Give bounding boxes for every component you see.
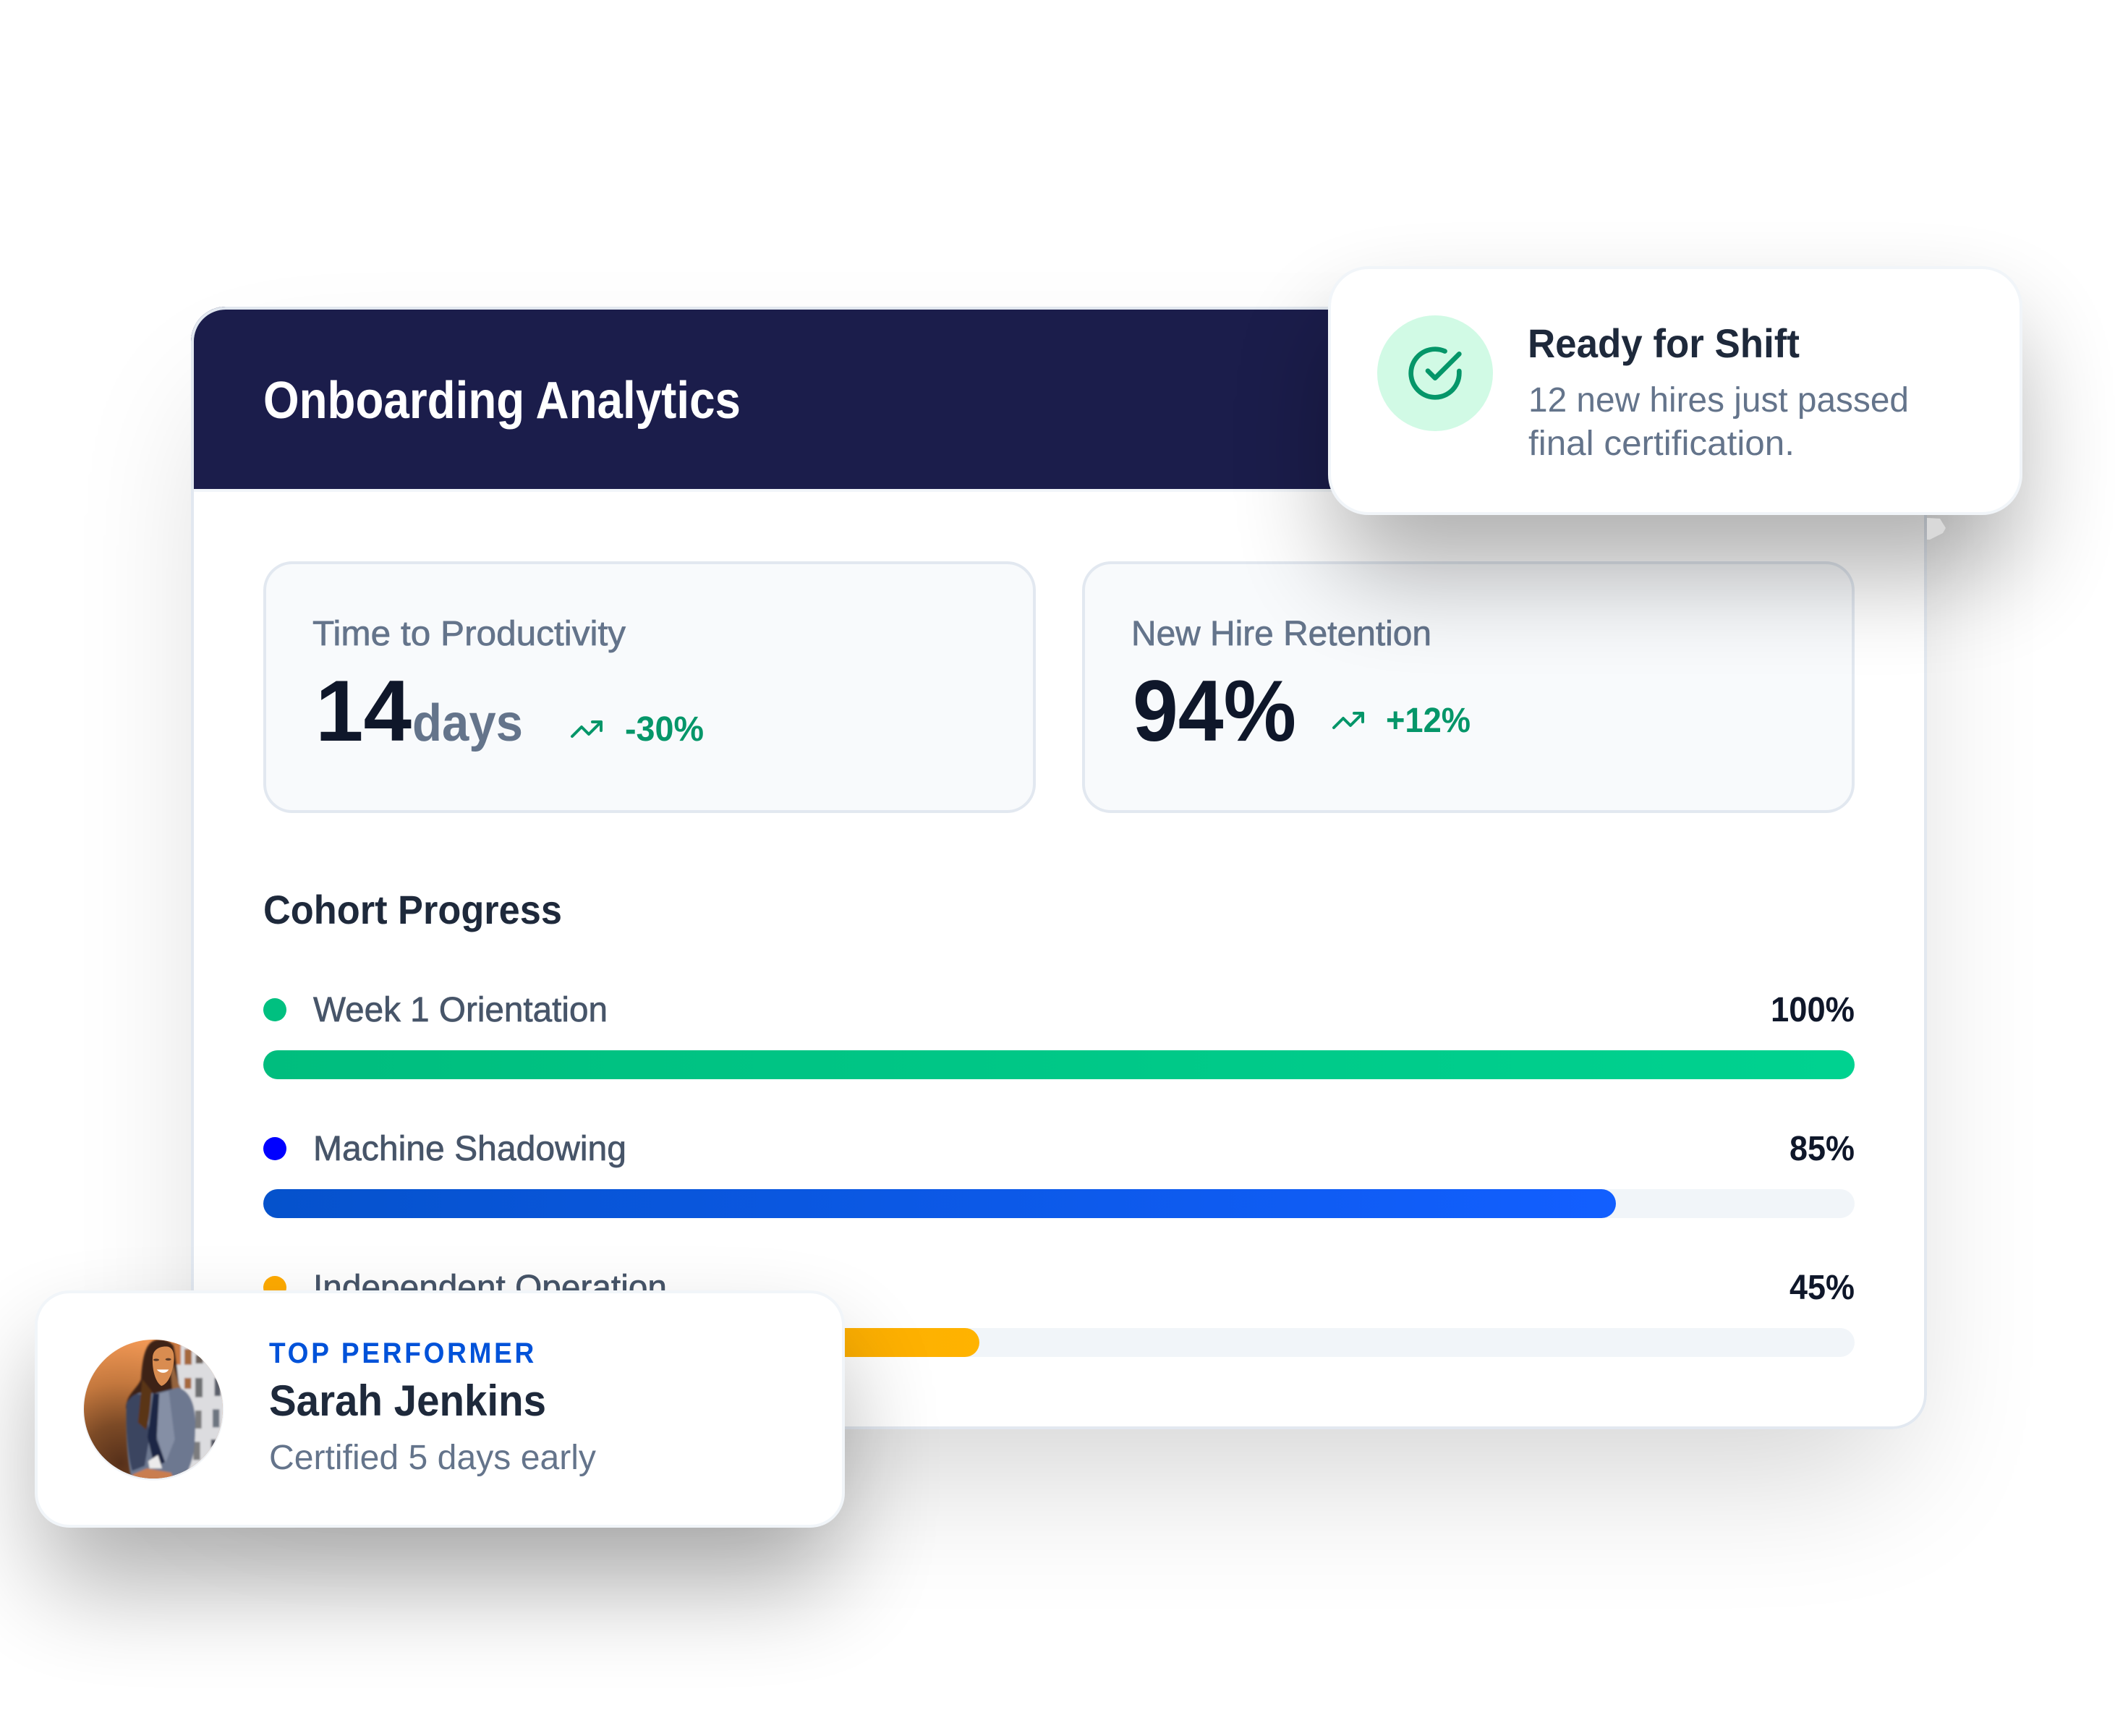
face: [153, 1347, 174, 1386]
name: Sarah Jenkins: [269, 1377, 546, 1425]
stat change: +12%: [1386, 702, 1471, 740]
progress row: machine shadowing: 85%: [1790, 1130, 1855, 1168]
progress row: machine shadowing: [263, 1130, 1855, 1218]
stat unit: days: [412, 694, 523, 752]
icon: trending up: [1334, 713, 1363, 728]
progress row: independent operation: Independent Operation: [313, 1269, 667, 1307]
callout text: [1528, 381, 1909, 463]
stat value: 14: [315, 663, 412, 760]
eyebrow label: TOP PERFORMER: [269, 1337, 537, 1369]
panel: main analytics card: [191, 307, 1927, 1429]
stat label: Time to Productivity: [312, 615, 626, 653]
callout text: final certification.: [1528, 425, 1795, 463]
progress row: week 1 orientation: Week 1 Orientation: [313, 991, 608, 1029]
progress row: independent operation: 45%: [1790, 1269, 1855, 1307]
heading: cohort progress: Cohort Progress: [263, 887, 562, 932]
icon: check circle: [1377, 315, 1493, 431]
stat change: -30%: [625, 710, 704, 749]
callout text: 12 new hires just passed: [1528, 381, 1909, 420]
avatar photo: Sarah Jenkins: [82, 1336, 228, 1485]
title: Onboarding Analytics: [263, 372, 741, 430]
progress row: independent operation: [263, 1269, 1855, 1357]
icon: trending up: [572, 722, 601, 736]
blazer: [127, 1387, 195, 1483]
panel: time to productivity stat: [265, 563, 1034, 812]
stat value: 94%: [1133, 663, 1296, 760]
callout: top performer: [35, 1290, 845, 1528]
stat label: New Hire Retention: [1131, 615, 1431, 653]
panel: new hire retention stat: [1084, 563, 1853, 812]
progress row: week 1 orientation: [263, 991, 1855, 1079]
callout heading: Ready for Shift: [1528, 320, 1800, 366]
hair: [125, 1340, 179, 1409]
header band: [191, 307, 1927, 492]
hands: [132, 1467, 174, 1478]
progress row: week 1 orientation: 100%: [1771, 991, 1855, 1029]
progress row: machine shadowing: Machine Shadowing: [313, 1130, 626, 1168]
subtitle: Certified 5 days early: [269, 1439, 596, 1477]
callout: ready for shift: [1328, 266, 2022, 515]
